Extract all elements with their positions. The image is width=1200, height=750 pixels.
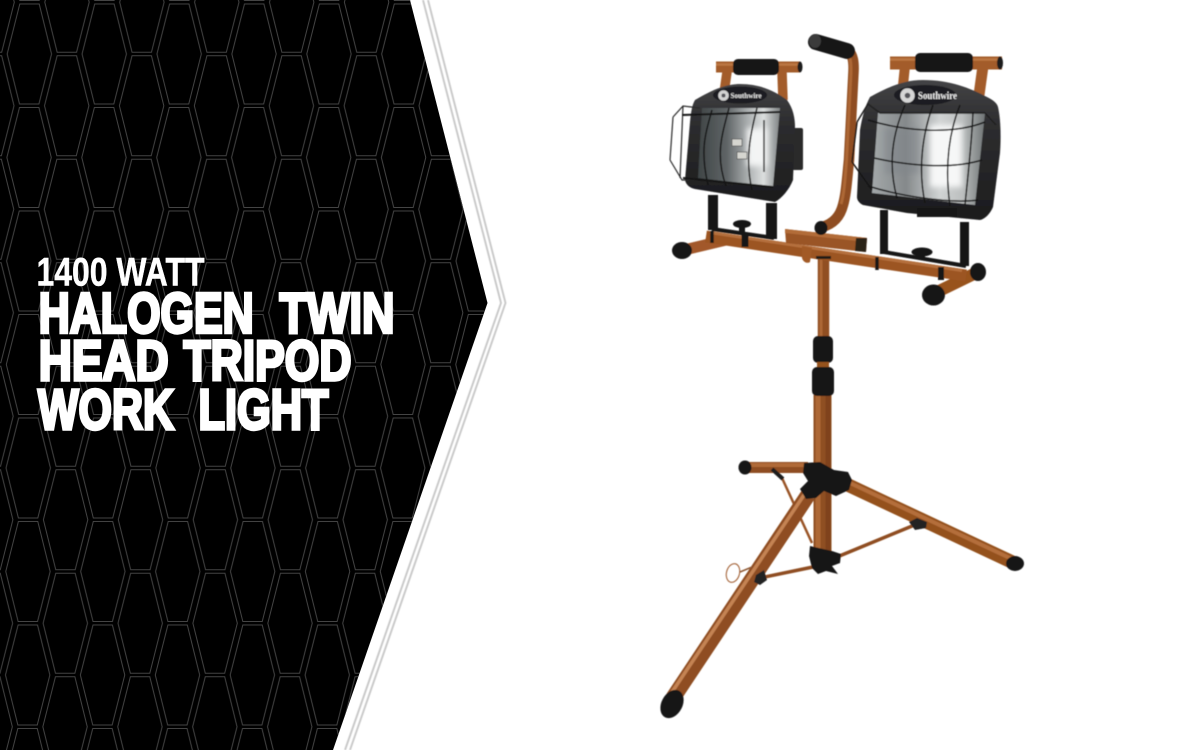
left lamp logo: Southwire [730,91,762,100]
center handle [809,34,854,227]
mast upper section [821,255,824,340]
title line: HEAD TRIPOD: HEAD [39,329,169,393]
title line: HALOGEN TWIN: TWIN [280,281,394,345]
center mount block [785,229,867,263]
upper hub [800,462,852,499]
title line: WORK LIGHT: LIGHT [198,378,329,442]
right lamp handle [890,53,1003,95]
right lamp logo: Southwire [918,91,957,102]
left lamp glass [698,108,780,187]
strut to front leg [760,567,813,578]
product illustration: twin head tripod work light [656,34,1024,722]
right lamp cage [852,104,996,206]
right lamp bracket [880,210,969,266]
front leg [656,492,808,722]
right lamp glass [872,113,985,205]
center handle lower end cap [814,221,828,235]
left lamp bulb holders [732,139,747,159]
title [36,251,394,442]
lower hub [809,546,841,574]
right leg clamp [909,518,927,530]
right lamp housing [857,80,1001,220]
right lamp head [852,53,1003,220]
background panel: black chevron with hexagon pattern [0,0,488,750]
right leg [848,482,1024,571]
copper handle tube [822,50,854,227]
title line: HEAD TRIPOD [39,329,351,393]
left lamp head [670,59,803,202]
front leg clamp [754,570,767,585]
right foot [922,263,986,306]
strut to right leg [837,524,917,557]
right lamp foot plate [917,208,957,217]
mast collar 1 [813,336,833,363]
title line: HALOGEN TWIN: HALOGEN [39,281,254,345]
locking ring pin [724,562,752,584]
left lamp bracket [708,195,777,239]
left lamp cage [670,106,780,190]
left lamp handle [716,59,802,100]
crossbar [706,231,966,280]
foam grip [809,34,847,51]
thin strut to upper leg [782,478,812,543]
lower mast section [818,395,828,556]
strut clip [772,469,783,479]
left lamp housing [685,84,795,202]
chevron outline strokes [345,0,506,750]
mast collar 2 [812,367,834,396]
title line: WORK LIGHT [38,378,329,442]
upper short leg [738,460,808,474]
right lamp logo [894,85,957,105]
left lamp side box [792,128,803,170]
tripod legs [656,395,1024,722]
left lamp logo [713,86,767,104]
left foot [672,240,726,259]
subtitle: 1400 WATT: 1400 WATT [36,251,204,295]
title line: WORK LIGHT: WORK [38,378,174,442]
title line: HEAD TRIPOD: TRIPOD [184,329,352,393]
bar collars [712,231,941,280]
mast joint [817,362,829,368]
